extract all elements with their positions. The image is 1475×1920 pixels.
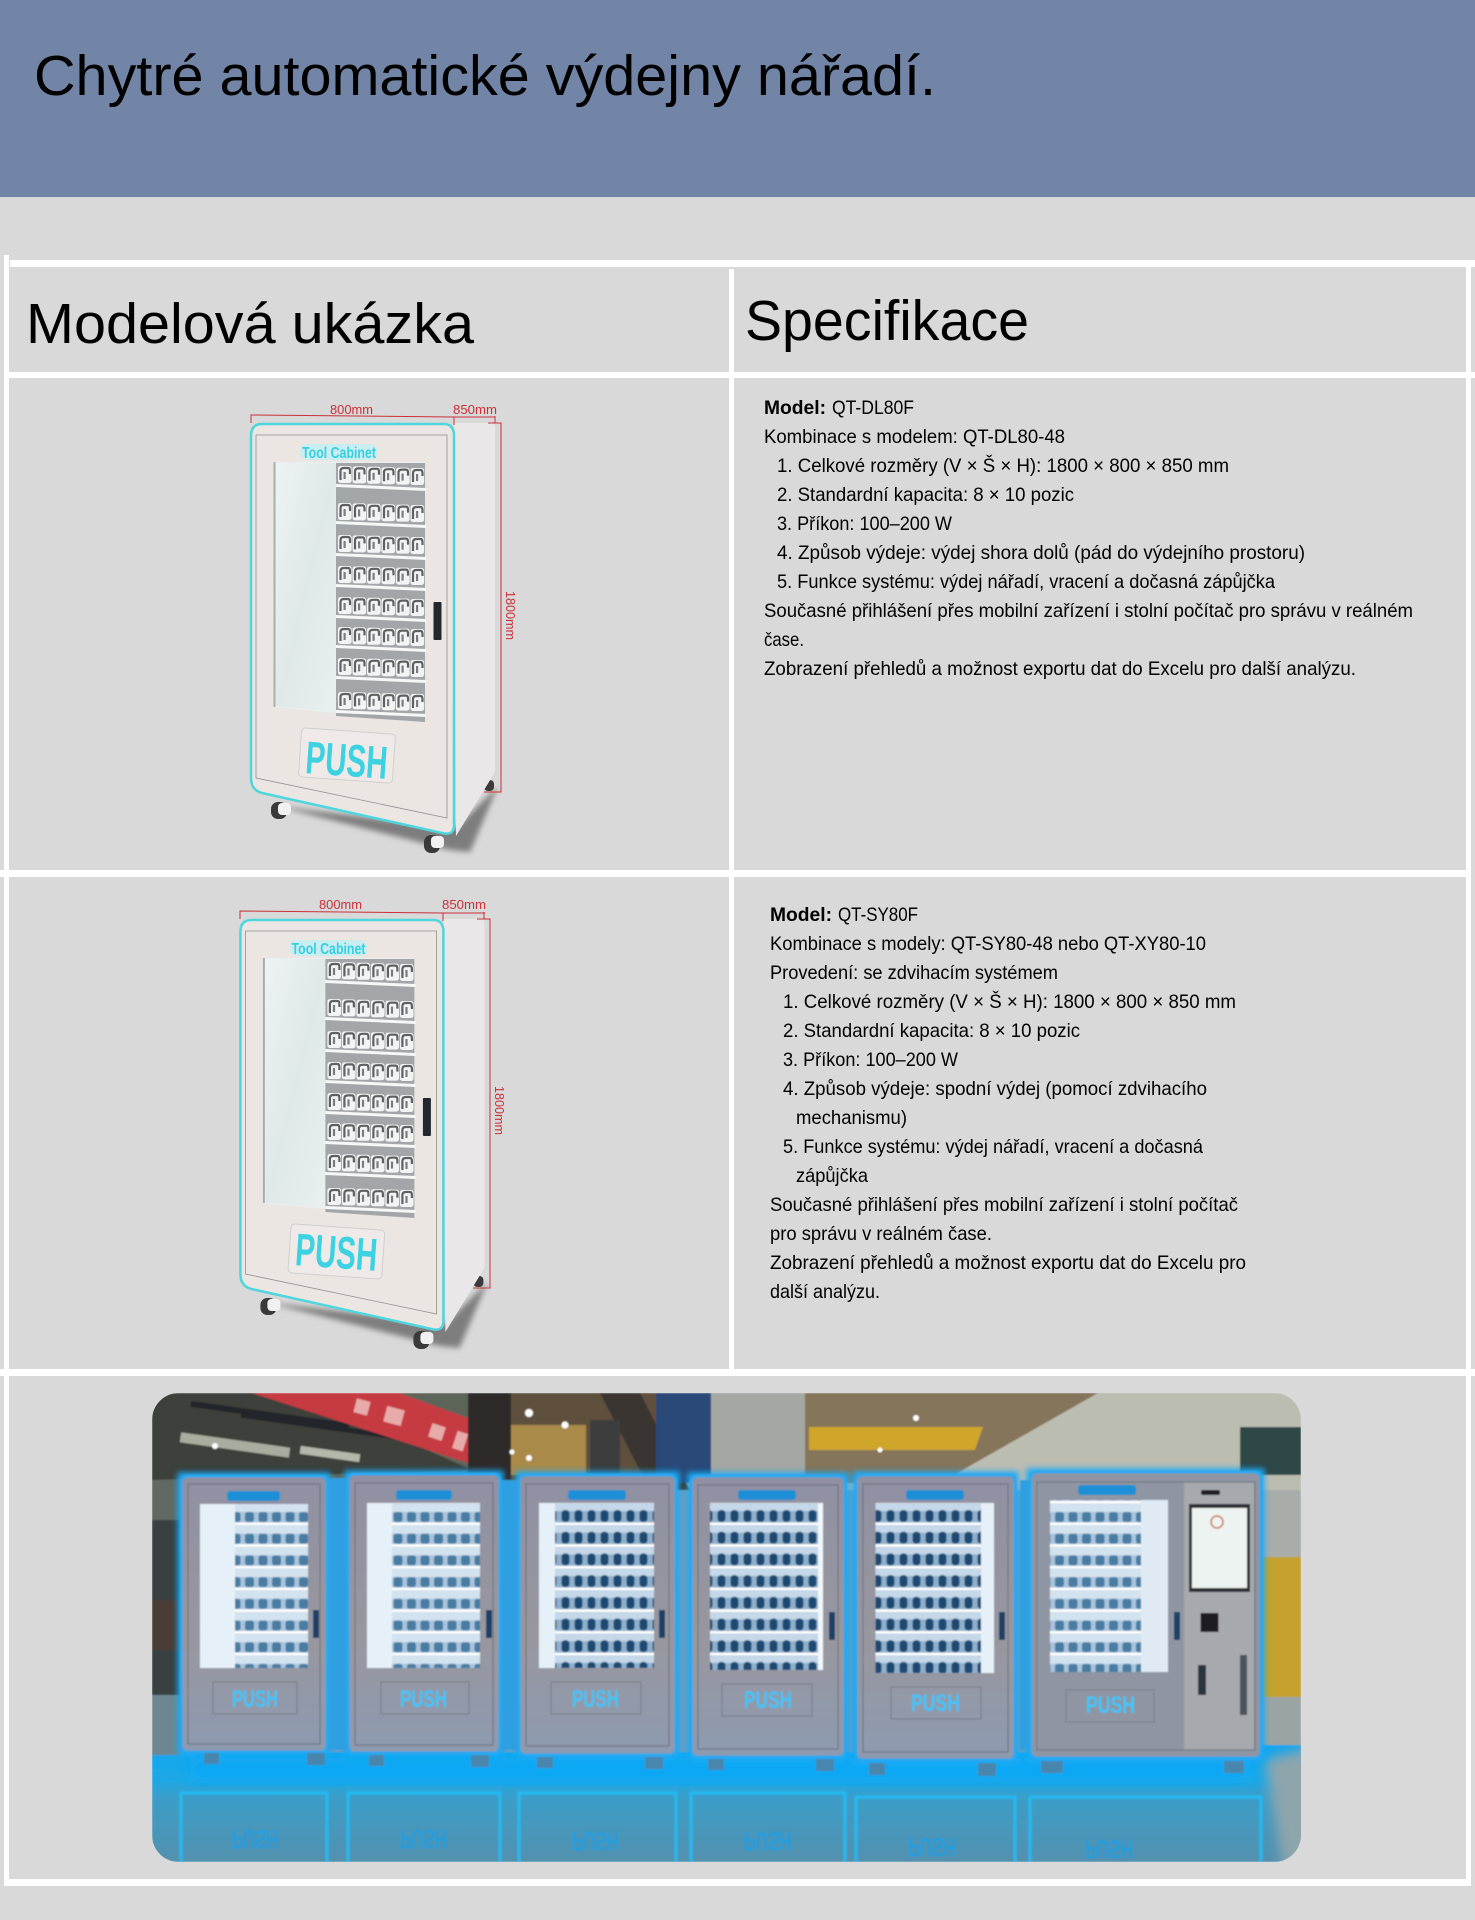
cabinet label: Tool Cabinet (302, 445, 377, 462)
heading: Modelová ukázka: Modelová ukázka (26, 292, 474, 356)
specification text: QT-DL80F: Kombinace s modelem: QT-DL80-48 (764, 426, 1065, 448)
heading: Specifikace: Specifikace (745, 289, 1029, 353)
cabinet F with touch screen (1020, 1472, 1261, 1773)
specification text: QT-SY80F: Kombinace s modely: QT-SY80-48 nebo QT-XY80-10 (770, 933, 1206, 955)
specification text: QT-DL80F: čase. (764, 629, 804, 651)
floor glow and reflections: PUSH (1085, 1834, 1133, 1864)
specification text: QT-SY80F: 5. Funkce systému: výdej nářadí, vracení a dočasná (783, 1136, 1203, 1158)
specification text: QT-SY80F: mechanismu) (796, 1107, 907, 1129)
dimension: width: 800mm (319, 897, 362, 912)
cabinet B (348, 1474, 522, 1767)
cabinet C (519, 1475, 676, 1769)
floor glow and reflections: PUSH (400, 1824, 447, 1854)
specification text: QT-DL80F: 2. Standardní kapacita: 8 × 10 pozic (777, 484, 1074, 506)
specification text: QT-SY80F: Zobrazení přehledů a možnost exportu dat do Excelu pro (770, 1252, 1246, 1274)
cabinet C: PUSH (572, 1686, 619, 1713)
cabinet F with touch screen: PUSH (1086, 1692, 1135, 1719)
floor glow and reflections: PUSH (744, 1826, 792, 1856)
cabinet A: PUSH (232, 1686, 278, 1713)
dimension: height: 1800mm (503, 591, 518, 640)
specification text: QT-DL80F: QT-DL80F (832, 397, 914, 419)
specification text: QT-SY80F: QT-SY80F (838, 904, 918, 926)
floor glow and reflections: PUSH (232, 1824, 278, 1854)
cabinet D: PUSH (744, 1687, 792, 1714)
specification text: QT-DL80F: 3. Příkon: 100–200 W (777, 513, 953, 535)
dimension lines (251, 415, 501, 792)
specification text: QT-SY80F: pro správu v reálném čase. (770, 1223, 992, 1245)
specification text: QT-DL80F: Model: (764, 397, 826, 419)
floor glow and reflections: PUSH (908, 1832, 956, 1862)
product image: model QT-SY80F cabinet (240, 897, 507, 1349)
photo: row of six illuminated tool cabinets (152, 1393, 1320, 1880)
dimension: height: 1800mm (492, 1086, 507, 1135)
specification text: QT-DL80F: 1. Celkové rozměry (V × Š × H): 1800 × 800 × 850 mm (777, 454, 1229, 477)
cabinet A (181, 1476, 350, 1765)
dimension: depth: 850mm (453, 402, 497, 417)
specification text: QT-SY80F (770, 904, 1246, 1303)
specification text: QT-SY80F: 1. Celkové rozměry (V × Š × H): 1800 × 800 × 850 mm (783, 990, 1236, 1013)
specification text: QT-SY80F: Model: (770, 904, 832, 926)
PUSH label: PUSH (304, 731, 389, 789)
cabinet E (856, 1475, 1015, 1776)
specification text: QT-DL80F: Současné přihlášení přes mobilní zařízení i stolní počítač pro správu v reálném (764, 600, 1413, 622)
PUSH label: PUSH (294, 1223, 379, 1281)
cabinet D (691, 1476, 845, 1771)
dimension: depth: 850mm (442, 897, 486, 912)
specification text: QT-SY80F: 2. Standardní kapacita: 8 × 10 pozic (783, 1020, 1080, 1042)
specification text: QT-DL80F: 4. Způsob výdeje: výdej shora dolů (pád do výdejního prostoru) (777, 542, 1305, 564)
specification text: QT-SY80F: další analýzu. (770, 1281, 880, 1303)
specification text: QT-DL80F: 5. Funkce systému: výdej nářadí, vracení a dočasná zápůjčka (777, 571, 1275, 593)
specification text: QT-DL80F: Zobrazení přehledů a možnost exportu dat do Excelu pro další analýzu. (764, 658, 1356, 680)
title: Chytré automatické výdejny nářadí. (34, 44, 936, 108)
floor glow and reflections (181, 1758, 1261, 1864)
specification text: QT-SY80F: 3. Příkon: 100–200 W (783, 1049, 959, 1071)
specification text: QT-SY80F: zápůjčka (796, 1165, 868, 1187)
dimension lines (240, 911, 490, 1288)
gaps between cabinets (327, 1490, 1027, 1752)
product image: model QT-DL80F cabinet (251, 402, 518, 853)
floor glow and reflections: PUSH (572, 1826, 619, 1856)
cabinet E: PUSH (911, 1690, 960, 1717)
cabinet edge glow (181, 1472, 1261, 1760)
specification text: QT-DL80F (764, 397, 1413, 680)
dimension: width: 800mm (330, 402, 373, 417)
floor (152, 1745, 1301, 1862)
cabinet B: PUSH (400, 1686, 447, 1713)
specification text: QT-SY80F: Provedení: se zdvihacím systémem (770, 962, 1058, 984)
specification text: QT-SY80F: Současné přihlášení přes mobilní zařízení i stolní počítač (770, 1194, 1238, 1216)
cabinet label: Tool Cabinet (292, 941, 366, 958)
specification text: QT-SY80F: 4. Způsob výdeje: spodní výdej (pomocí zdvihacího (783, 1078, 1207, 1100)
factory background (152, 1393, 1301, 1757)
title banner (0, 0, 1475, 197)
